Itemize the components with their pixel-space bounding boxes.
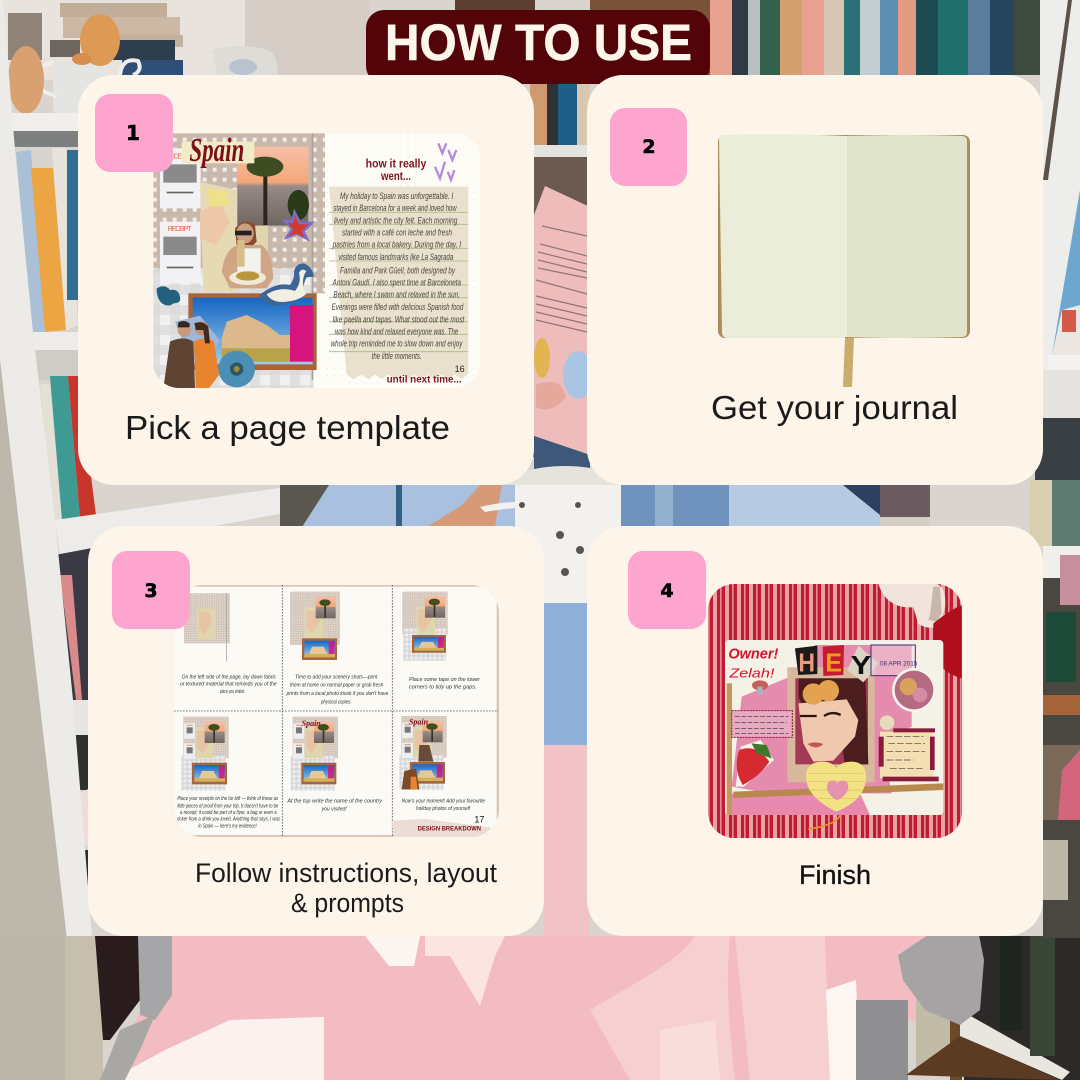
panel: step 4 <box>587 526 1043 936</box>
panel: step 1 <box>78 75 534 485</box>
breakdown captions: little pieces of proof from your trip. It doesn't have to be <box>177 803 278 809</box>
lined paper with handwritten story: visited famous landmarks like La Sagrada <box>338 252 453 262</box>
gingham note <box>879 728 939 781</box>
chair legs, shelf and dark books at the bottom <box>0 930 1080 1080</box>
breakdown captions: Place some tape on the lower <box>409 677 481 683</box>
breakdown captions: Time to add your scenery shots—print <box>295 674 378 680</box>
until next time: until next time... <box>387 375 462 386</box>
how it really went heading: went... <box>380 170 411 183</box>
stage 3 collage <box>402 592 448 661</box>
orange ribbon <box>808 815 840 829</box>
stage 4 collage <box>181 717 229 791</box>
speech note <box>732 711 792 737</box>
lined paper with handwritten story: whole trip reminded me to slow down and enjoy <box>331 339 463 349</box>
step number badge 1: 1 <box>126 121 140 145</box>
blank open journal <box>718 134 970 387</box>
step number badge 2: 2 <box>642 136 656 158</box>
breakdown captions: Now's your moment! Add your favourite <box>402 799 485 805</box>
sunset photo <box>237 147 309 226</box>
breakdown captions: holiday photos of yourself <box>416 806 471 812</box>
lined paper with handwritten story: Evenings were filled with delicious Spanish food <box>332 302 464 312</box>
woman eating pasta <box>222 222 273 288</box>
swan sticker <box>259 263 314 306</box>
Owner Zelah handwritten: Zelah! <box>728 666 775 680</box>
map <box>200 182 237 292</box>
lined paper with handwritten story: Familia and Park Güell, both designed by <box>340 265 455 275</box>
left shelves and books <box>0 0 300 1080</box>
stage 6 collage: Spain <box>409 718 429 727</box>
label: pick a page template: Pick a page template <box>125 409 450 446</box>
breakdown captions: you visited! <box>321 807 347 813</box>
step number badge 4 <box>628 551 706 629</box>
step number badge 1 <box>95 94 173 172</box>
label: follow instructions: & prompts <box>291 888 404 918</box>
stage 5 collage <box>291 717 338 791</box>
Owner Zelah handwritten: Owner! <box>728 646 778 662</box>
design breakdown spread <box>170 580 510 840</box>
two women friends <box>163 316 220 388</box>
Owner Zelah handwritten <box>729 648 778 678</box>
label: follow instructions: Follow instructions, layout <box>195 858 497 888</box>
passport stamp: 08 APR 2015 <box>880 660 918 667</box>
label: get your journal: Get your journal <box>711 389 958 426</box>
denim shirt strip <box>280 485 930 748</box>
top shelf items left <box>0 0 535 117</box>
step number badge 3 <box>112 551 190 629</box>
lined paper with handwritten story <box>329 187 468 379</box>
purple ticks <box>435 143 456 180</box>
lined paper with handwritten story: the little moments. <box>372 351 422 361</box>
HEY letters: H <box>798 648 815 678</box>
receipts: RECEIPT <box>168 226 192 233</box>
right shelves and books <box>1030 0 1080 938</box>
heart note <box>806 762 866 812</box>
stage 1 collage <box>184 593 230 662</box>
finished journal photo <box>700 580 970 840</box>
lined paper with handwritten story: stayed in Barcelona for a week and loved how <box>333 203 457 213</box>
top books right <box>590 0 1040 75</box>
breakdown captions: ticker from a drink you loved. Anything that says, I was <box>177 817 280 823</box>
stage 2 collage <box>290 592 340 660</box>
step number badge 4: 4 <box>660 580 674 602</box>
receipts: ECE <box>170 153 182 160</box>
lined paper with handwritten story: My holiday to Spain was unforgettable. I <box>340 191 454 201</box>
passport stamp <box>871 645 918 676</box>
lined paper with handwritten story: lively and artistic the city felt. Each morning <box>334 215 457 225</box>
palace photo in frame <box>188 293 317 370</box>
page number 16: 16 <box>455 364 465 374</box>
step number badge 2 <box>610 108 687 186</box>
blue flowers <box>157 286 255 387</box>
lined paper with handwritten story: Antoni Gaudí. I also spent time at Barceloneta <box>332 278 461 288</box>
receipts <box>160 148 201 283</box>
breakdown captions: On the left side of the page, lay down fabric <box>182 674 276 680</box>
label: follow instructions <box>195 858 497 918</box>
strawberry sticker <box>736 740 774 787</box>
how it really went heading: how it really <box>366 158 427 171</box>
blanket <box>110 745 1026 1080</box>
mug <box>878 584 945 628</box>
Spain title: Spain <box>189 132 244 169</box>
breakdown captions: At the top write the name of the country <box>286 799 383 805</box>
lined paper with handwritten story: was how kind and relaxed everyone was. The <box>335 326 458 336</box>
breakdown captions: physical copies. <box>320 699 352 705</box>
title text: HOW TO USE <box>385 14 692 71</box>
design breakdown tag <box>392 816 491 837</box>
Spain title <box>182 138 254 168</box>
HEY letters: E <box>825 648 842 678</box>
breakdown captions: them at home on normal paper or grab fresh <box>290 683 383 689</box>
design breakdown tag: DESIGN BREAKDOWN <box>418 827 481 833</box>
spread image: Spain journal template <box>150 125 490 395</box>
portrait illustration <box>787 667 875 782</box>
breakdown captions: or textured material that reminds you of the <box>180 682 277 688</box>
stage 5 collage: Spain <box>302 719 321 728</box>
breakdown captions: a receipt; it could be part of a flyer, a bag or even a <box>180 810 277 816</box>
breakdown captions <box>177 674 485 829</box>
glitter sticker <box>880 668 936 730</box>
design breakdown tag: 17 <box>474 815 484 825</box>
breakdown captions: place you visited. <box>219 689 245 695</box>
stage 6 collage <box>399 716 447 790</box>
breakdown captions: in Spain — here's my evidence! <box>198 823 257 829</box>
step number badge 3: 3 <box>144 580 158 602</box>
mushroom sticker <box>752 680 768 695</box>
HEY letters <box>795 645 878 682</box>
lined paper with handwritten story: started with a café con leche and fresh <box>342 228 452 238</box>
journal pages <box>725 640 943 815</box>
HEY letters: Y <box>851 650 871 680</box>
label: finish: Finish <box>799 860 871 890</box>
breakdown captions: prints from a local photo kiosk if you don't have <box>286 691 388 697</box>
lined paper with handwritten story: pastries from a local bakery. During the day, I <box>332 240 461 250</box>
how it really went heading <box>366 158 426 180</box>
breakdown captions: Place your receipts on the far left — think of these as <box>177 796 278 802</box>
center gap: books, pink book and mug <box>507 78 623 603</box>
title banner <box>366 10 710 84</box>
lined paper with handwritten story: Beach, where I swam and relaxed in the sun. <box>333 290 460 300</box>
panel: step 2 <box>587 75 1043 485</box>
breakdown captions: corners to tidy up the gaps. <box>409 685 477 691</box>
lined paper with handwritten story: like paella and tapas. What stood out the most <box>333 314 465 324</box>
starfish sticker <box>282 208 315 242</box>
panel: step 3 <box>88 526 544 936</box>
